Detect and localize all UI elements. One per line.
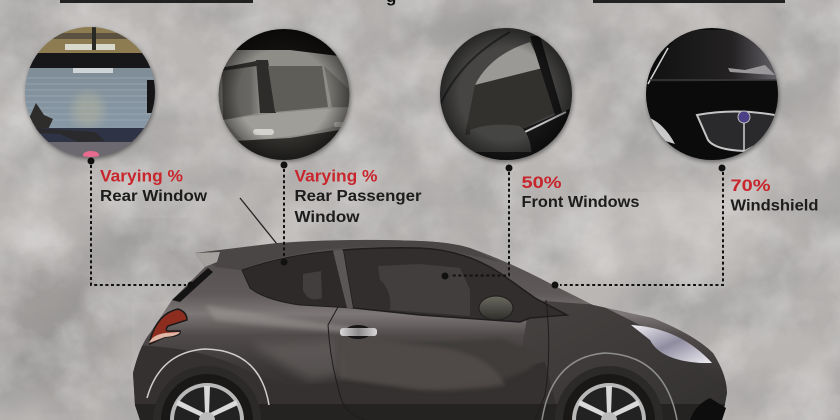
rear quarter window [242,251,353,308]
seat reflections [303,264,470,316]
tail light [149,309,187,344]
label: rear window: Rear Window [100,188,208,205]
label: front windows: 50% [522,173,562,192]
front lower grille [690,398,726,420]
label: windshield [730,176,818,214]
label: rear passenger window: Window [294,209,360,226]
door seam [328,300,549,420]
headlight [631,325,712,363]
rear wheel arch trim [147,349,269,405]
label: rear passenger window: Varying % [294,166,378,186]
connector lines [91,165,723,285]
label: rear passenger window: Rear Passenger [294,188,422,205]
label: rear passenger window [294,166,422,226]
front wheel arch trim [542,353,677,420]
window reflection pillar [333,250,353,308]
label: windshield: Windshield [730,198,818,214]
photo circle: windshield [640,25,785,165]
side mirror [479,296,513,320]
photo circle: rear window [20,20,160,159]
front wheel [555,366,663,420]
rear hatch glass strip [172,268,213,302]
label: front windows [522,173,640,211]
car body [120,240,740,420]
rear wheel [153,366,261,420]
label: front windows: Front Windows [522,194,640,211]
car illustration [120,240,740,420]
label: rear window: Varying % [100,166,183,186]
label: rear window [100,166,208,205]
top banner fragment left [60,0,253,3]
door handle [340,325,377,339]
photo circle: rear passenger window [215,25,355,165]
top banner fragment right [593,0,785,3]
connector dots [88,158,726,288]
photo circle: front windows [435,25,580,165]
antenna [240,198,277,244]
label: windshield: 70% [730,176,770,195]
door window [343,248,567,322]
